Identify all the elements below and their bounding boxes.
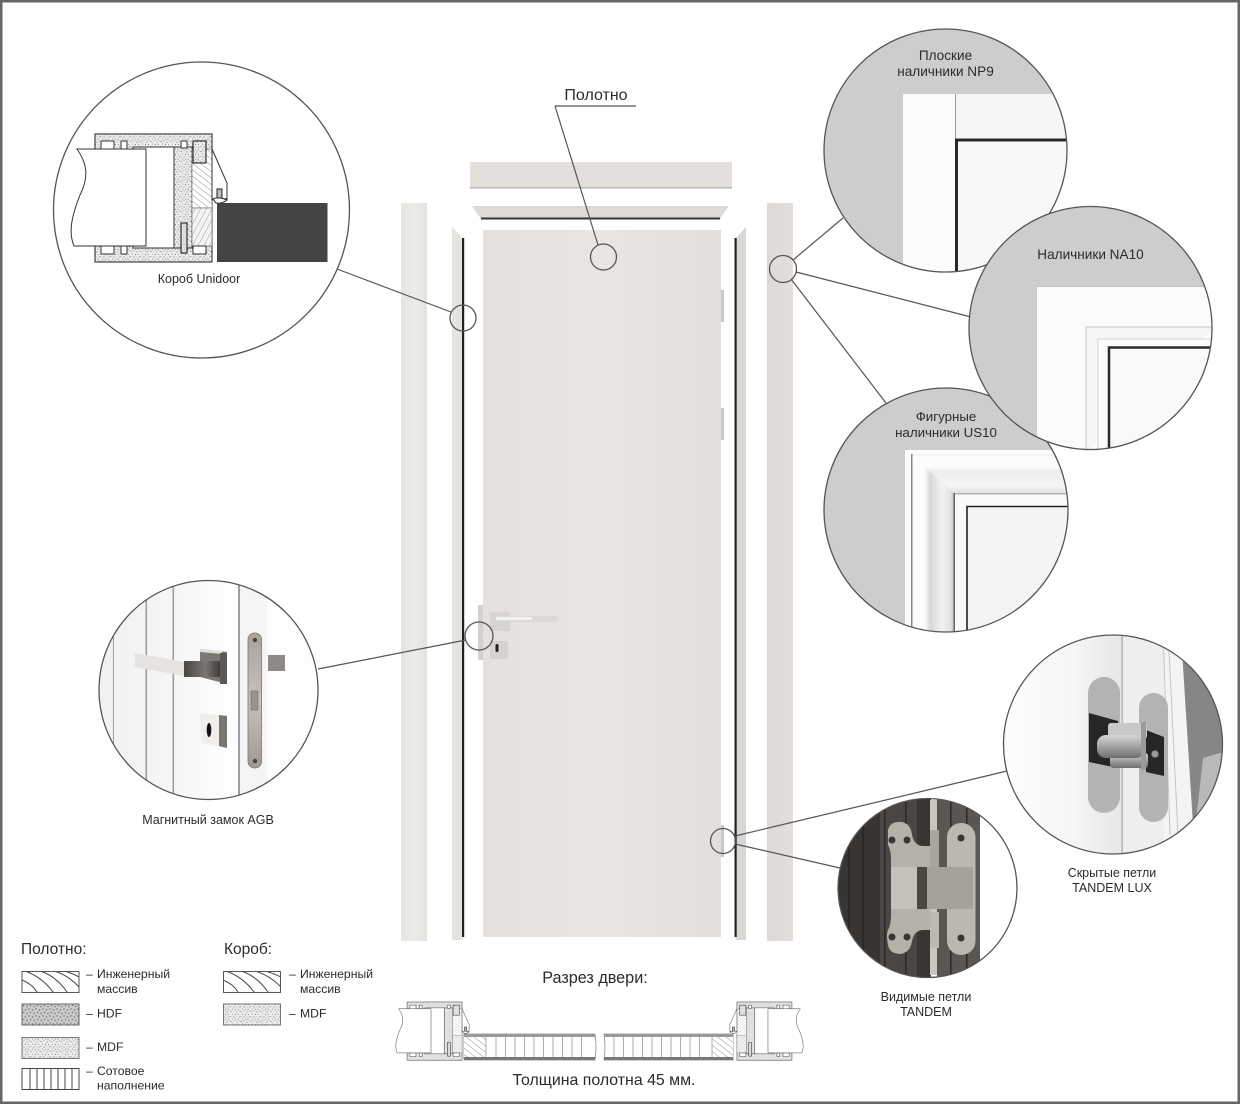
right jamb [734, 227, 746, 940]
frame cross-section [71, 134, 227, 262]
right frame section [730, 1002, 803, 1060]
door leaf [483, 230, 721, 937]
swatch label: Инженерный [97, 967, 170, 981]
door cross-section [396, 1002, 803, 1060]
swatch label: HDF [97, 1006, 122, 1020]
legend: Полотно [21, 941, 170, 1092]
circle: Короб Unidoor [54, 62, 350, 358]
swatch label: массив [97, 982, 138, 996]
mortise [1089, 713, 1164, 776]
swatch label: – [86, 967, 93, 981]
caption: Наличники NA10 [1037, 247, 1144, 262]
grooves [113, 578, 240, 804]
screw holes [888, 834, 964, 942]
legend title: Полотно: [21, 941, 87, 958]
swatch: MDF [22, 1038, 79, 1058]
hinges on door [721, 290, 724, 857]
caption: наличники US10 [895, 425, 997, 440]
swatch: engineered wood [223, 971, 281, 992]
caption: наличники NP9 [897, 64, 994, 79]
swatch label: – [86, 1064, 93, 1078]
caption: Фигурные [916, 409, 976, 424]
door surface [100, 585, 182, 794]
caption: TANDEM: Видимые петли [881, 990, 971, 1004]
right hinge plate [947, 823, 976, 955]
hinge slots [1088, 677, 1168, 822]
hinge pin [930, 800, 939, 975]
swatch: engineered wood [22, 971, 79, 992]
zoom rings [450, 244, 796, 854]
left jamb [452, 227, 464, 940]
caption: TANDEM LUX: Скрытые петли [1068, 866, 1156, 880]
swatch label: Сотовое [97, 1064, 145, 1078]
swatch label: – [86, 1006, 93, 1020]
lock plate [248, 633, 262, 768]
left hinge plate [887, 822, 932, 954]
right leaf section [604, 1034, 733, 1060]
key plate [200, 713, 227, 748]
swatch label: – [86, 1040, 93, 1054]
door assembly [401, 162, 793, 941]
circle: Плоские наличники NP9 [824, 29, 1078, 279]
left leaf section [464, 1034, 596, 1060]
centre block [891, 867, 973, 909]
circle: Фигурные наличники US10 [824, 388, 1081, 646]
magnetic strike [268, 655, 285, 671]
swatch label: наполнение [97, 1078, 165, 1092]
circle: Наличники NA10 [969, 206, 1218, 456]
swatch: HDF [22, 1004, 79, 1025]
caption: TANDEM LUX: TANDEM LUX [1072, 881, 1152, 895]
swatch label: – [289, 1006, 296, 1020]
circle: TANDEM LUX hinge [1000, 630, 1230, 860]
swatch: MDF [224, 1004, 280, 1025]
right casing [767, 203, 793, 941]
swatch label: MDF [97, 1040, 123, 1054]
swatch label: Инженерный [300, 967, 373, 981]
circle: TANDEM hinge [835, 795, 1020, 985]
circle: lock [95, 578, 323, 804]
handle rose [200, 649, 227, 684]
swatch: honeycomb [22, 1068, 79, 1090]
swatch label: MDF [300, 1006, 326, 1020]
wall block [217, 203, 328, 262]
top jamb [472, 206, 729, 220]
callout leader lines [318, 106, 1007, 868]
caption: lock: Магнитный замок AGB [142, 813, 274, 827]
swatch label: массив [300, 982, 341, 996]
door section heading: Разрез двери: [542, 969, 648, 987]
swatch label: – [289, 967, 296, 981]
caption: Короб Unidoor [158, 272, 240, 286]
hinge knuckles [1097, 722, 1159, 770]
top casing [470, 162, 732, 188]
label: Полотно: Полотно [564, 87, 628, 104]
legend title: Короб: [224, 941, 272, 958]
door handle [478, 605, 558, 660]
left frame section [396, 1002, 469, 1060]
left casing [401, 203, 427, 941]
thickness note: Толщина полотна 45 мм. [513, 1072, 695, 1089]
caption: Плоские [919, 48, 972, 63]
lever [135, 653, 220, 677]
legend: Короб [223, 941, 373, 1025]
caption: TANDEM: TANDEM [900, 1005, 952, 1019]
